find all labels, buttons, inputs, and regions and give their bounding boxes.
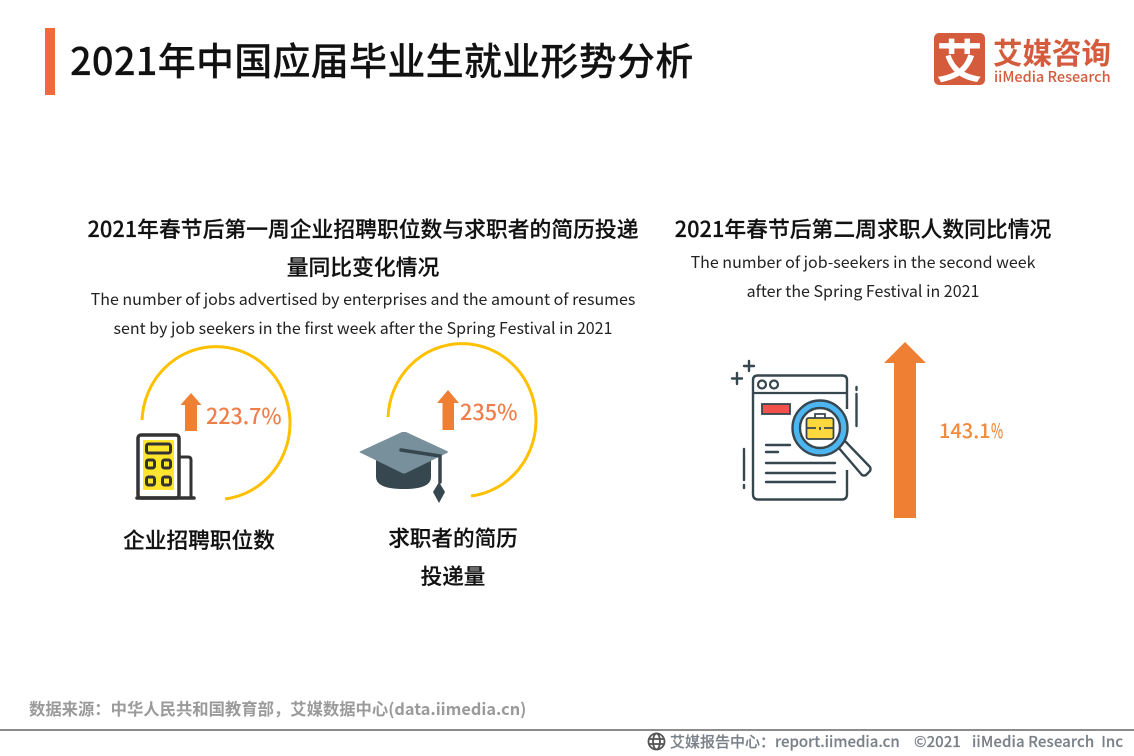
logo icon: 艾 (936, 26, 982, 92)
value: 223.7%: 223.7% (206, 400, 282, 431)
label: resumes (388, 522, 518, 591)
label: resumes: 求职者的简历 (388, 522, 518, 553)
title: 2021年中国应届毕业生就业形势分析 (70, 31, 694, 86)
left heading: 2021年春节后第一周企业招聘职位数与求职者的简历投递 (87, 212, 639, 244)
right English subtitle: The number of job-seekers in the second week (691, 249, 1035, 273)
value: 143.1%: 143.1 (939, 415, 991, 444)
left English subtitle: The number of jobs advertised by enterprises and the amount of resumes (91, 286, 635, 310)
ring: job positions (142, 347, 290, 499)
logo: iiMedia Research (934, 26, 1111, 92)
icon: graduation cap (360, 432, 448, 503)
footer icon: globe (648, 732, 666, 750)
right heading: 2021年春节后第二周求职人数同比情况 (675, 212, 1051, 244)
footer text: 艾媒报告中心：report.iimedia.cn (670, 731, 900, 752)
data source: 数据来源：中华人民共和国教育部，艾媒数据中心(data.iimedia.cn) (29, 696, 526, 720)
footer copyright: ©2021 (914, 731, 961, 752)
label: job positions: 企业招聘职位数 (123, 524, 275, 555)
logo English name: iiMedia Research (994, 66, 1111, 87)
icon: office building (137, 435, 194, 498)
arrow: resumes up (437, 390, 459, 430)
arrow: job positions up (180, 393, 202, 431)
label: resumes: 投递量 (421, 560, 485, 591)
footer divider (0, 729, 1134, 731)
ring: resumes (388, 344, 536, 496)
right English subtitle (691, 249, 1036, 302)
left heading (87, 212, 639, 282)
value: 143.1%: % (991, 415, 1003, 444)
large arrow: job seekers up (884, 342, 926, 518)
left heading: 量同比变化情况 (287, 250, 439, 282)
left English subtitle: sent by job seekers in the first week after the Spring Festival in 2021 (114, 315, 612, 339)
value: 235%: 235% (460, 396, 517, 427)
footer company: iiMedia Research Inc (972, 731, 1123, 752)
icon: job search document with magnifier (732, 361, 870, 500)
left English subtitle (91, 286, 635, 339)
right English subtitle: after the Spring Festival in 2021 (747, 278, 979, 302)
title accent bar (45, 28, 55, 95)
logo Chinese name: 艾媒咨询 (993, 31, 1111, 73)
